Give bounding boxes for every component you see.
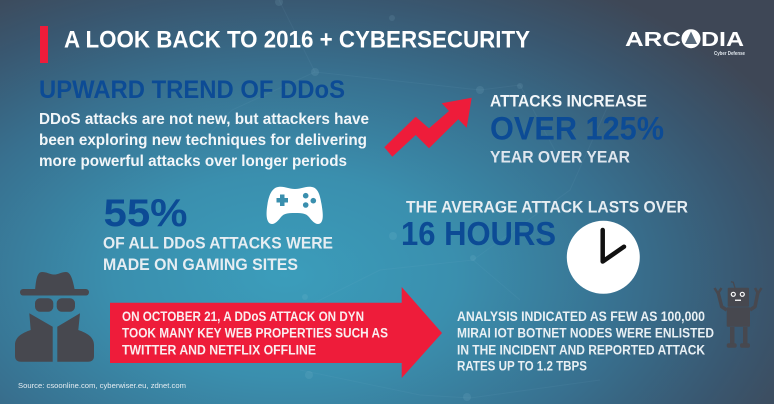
stat: attacks increase: ATTACKS INCREASE: [490, 92, 647, 111]
icon: game controller: [267, 187, 323, 224]
logo: Arcadia: DIA: [701, 29, 744, 51]
stat: gaming sites: 55%: [104, 192, 188, 235]
text block: botnet analysis: ANALYSIS INDICATED AS FEW AS 100,000: [457, 309, 705, 324]
body text: DDoS intro: been exploring new techniques for delivering: [39, 132, 367, 149]
stat: average attack duration: 16 HOURS: [401, 215, 556, 252]
body text: DDoS intro: [39, 111, 369, 170]
stat: average attack duration: THE AVERAGE ATTACK LASTS OVER: [406, 198, 688, 217]
text block: botnet analysis: IN THE INCIDENT AND REPORTED ATTACK: [457, 342, 705, 357]
logo: Arcadia: [625, 29, 745, 57]
stat: gaming sites: [103, 192, 333, 274]
icon: hacker: [15, 272, 94, 362]
stat: gaming sites: MADE ON GAMING SITES: [103, 255, 298, 274]
stat: attacks increase: YEAR OVER YEAR: [490, 147, 630, 166]
arrow: rising trend: [384, 98, 472, 157]
title: A LOOK BACK TO 2016 + CYBERSECURITY: [64, 26, 530, 54]
text block: botnet analysis: RATES UP TO 1.2 TBPS: [457, 359, 587, 374]
stat: gaming sites: OF ALL DDoS ATTACKS WERE: [103, 234, 333, 252]
source note: Source: csoonline.com, cyberwiser.eu, zdnet.com: [18, 381, 186, 390]
callout: red arrow: TWITTER AND NETFLIX OFFLINE: [122, 342, 316, 357]
text block: botnet analysis: [457, 309, 714, 374]
icon: robot: [714, 282, 762, 348]
stat: attacks increase: OVER 125%: [490, 110, 664, 146]
stat: average attack duration: [401, 198, 688, 252]
body text: DDoS intro: more powerful attacks over longer periods: [39, 153, 347, 170]
callout: red arrow: [110, 287, 442, 378]
text block: botnet analysis: MIRAI IOT BOTNET NODES WERE ENLISTED: [457, 326, 714, 341]
callout: red arrow: TOOK MANY KEY WEB PROPERTIES SUCH AS: [122, 326, 388, 341]
stat: attacks increase: [490, 92, 664, 166]
body text: DDoS intro: DDoS attacks are not new, but attackers have: [39, 111, 369, 128]
heading: upward trend: UPWARD TREND OF DDoS: [39, 76, 345, 104]
logo: Arcadia: ARC: [625, 29, 681, 51]
title accent bar: [40, 26, 48, 63]
icon: clock: [567, 221, 640, 294]
logo: Arcadia: Cyber Defense: [714, 51, 745, 57]
callout: red arrow: ON OCTOBER 21, A DDoS ATTACK ON DYN: [122, 309, 364, 324]
